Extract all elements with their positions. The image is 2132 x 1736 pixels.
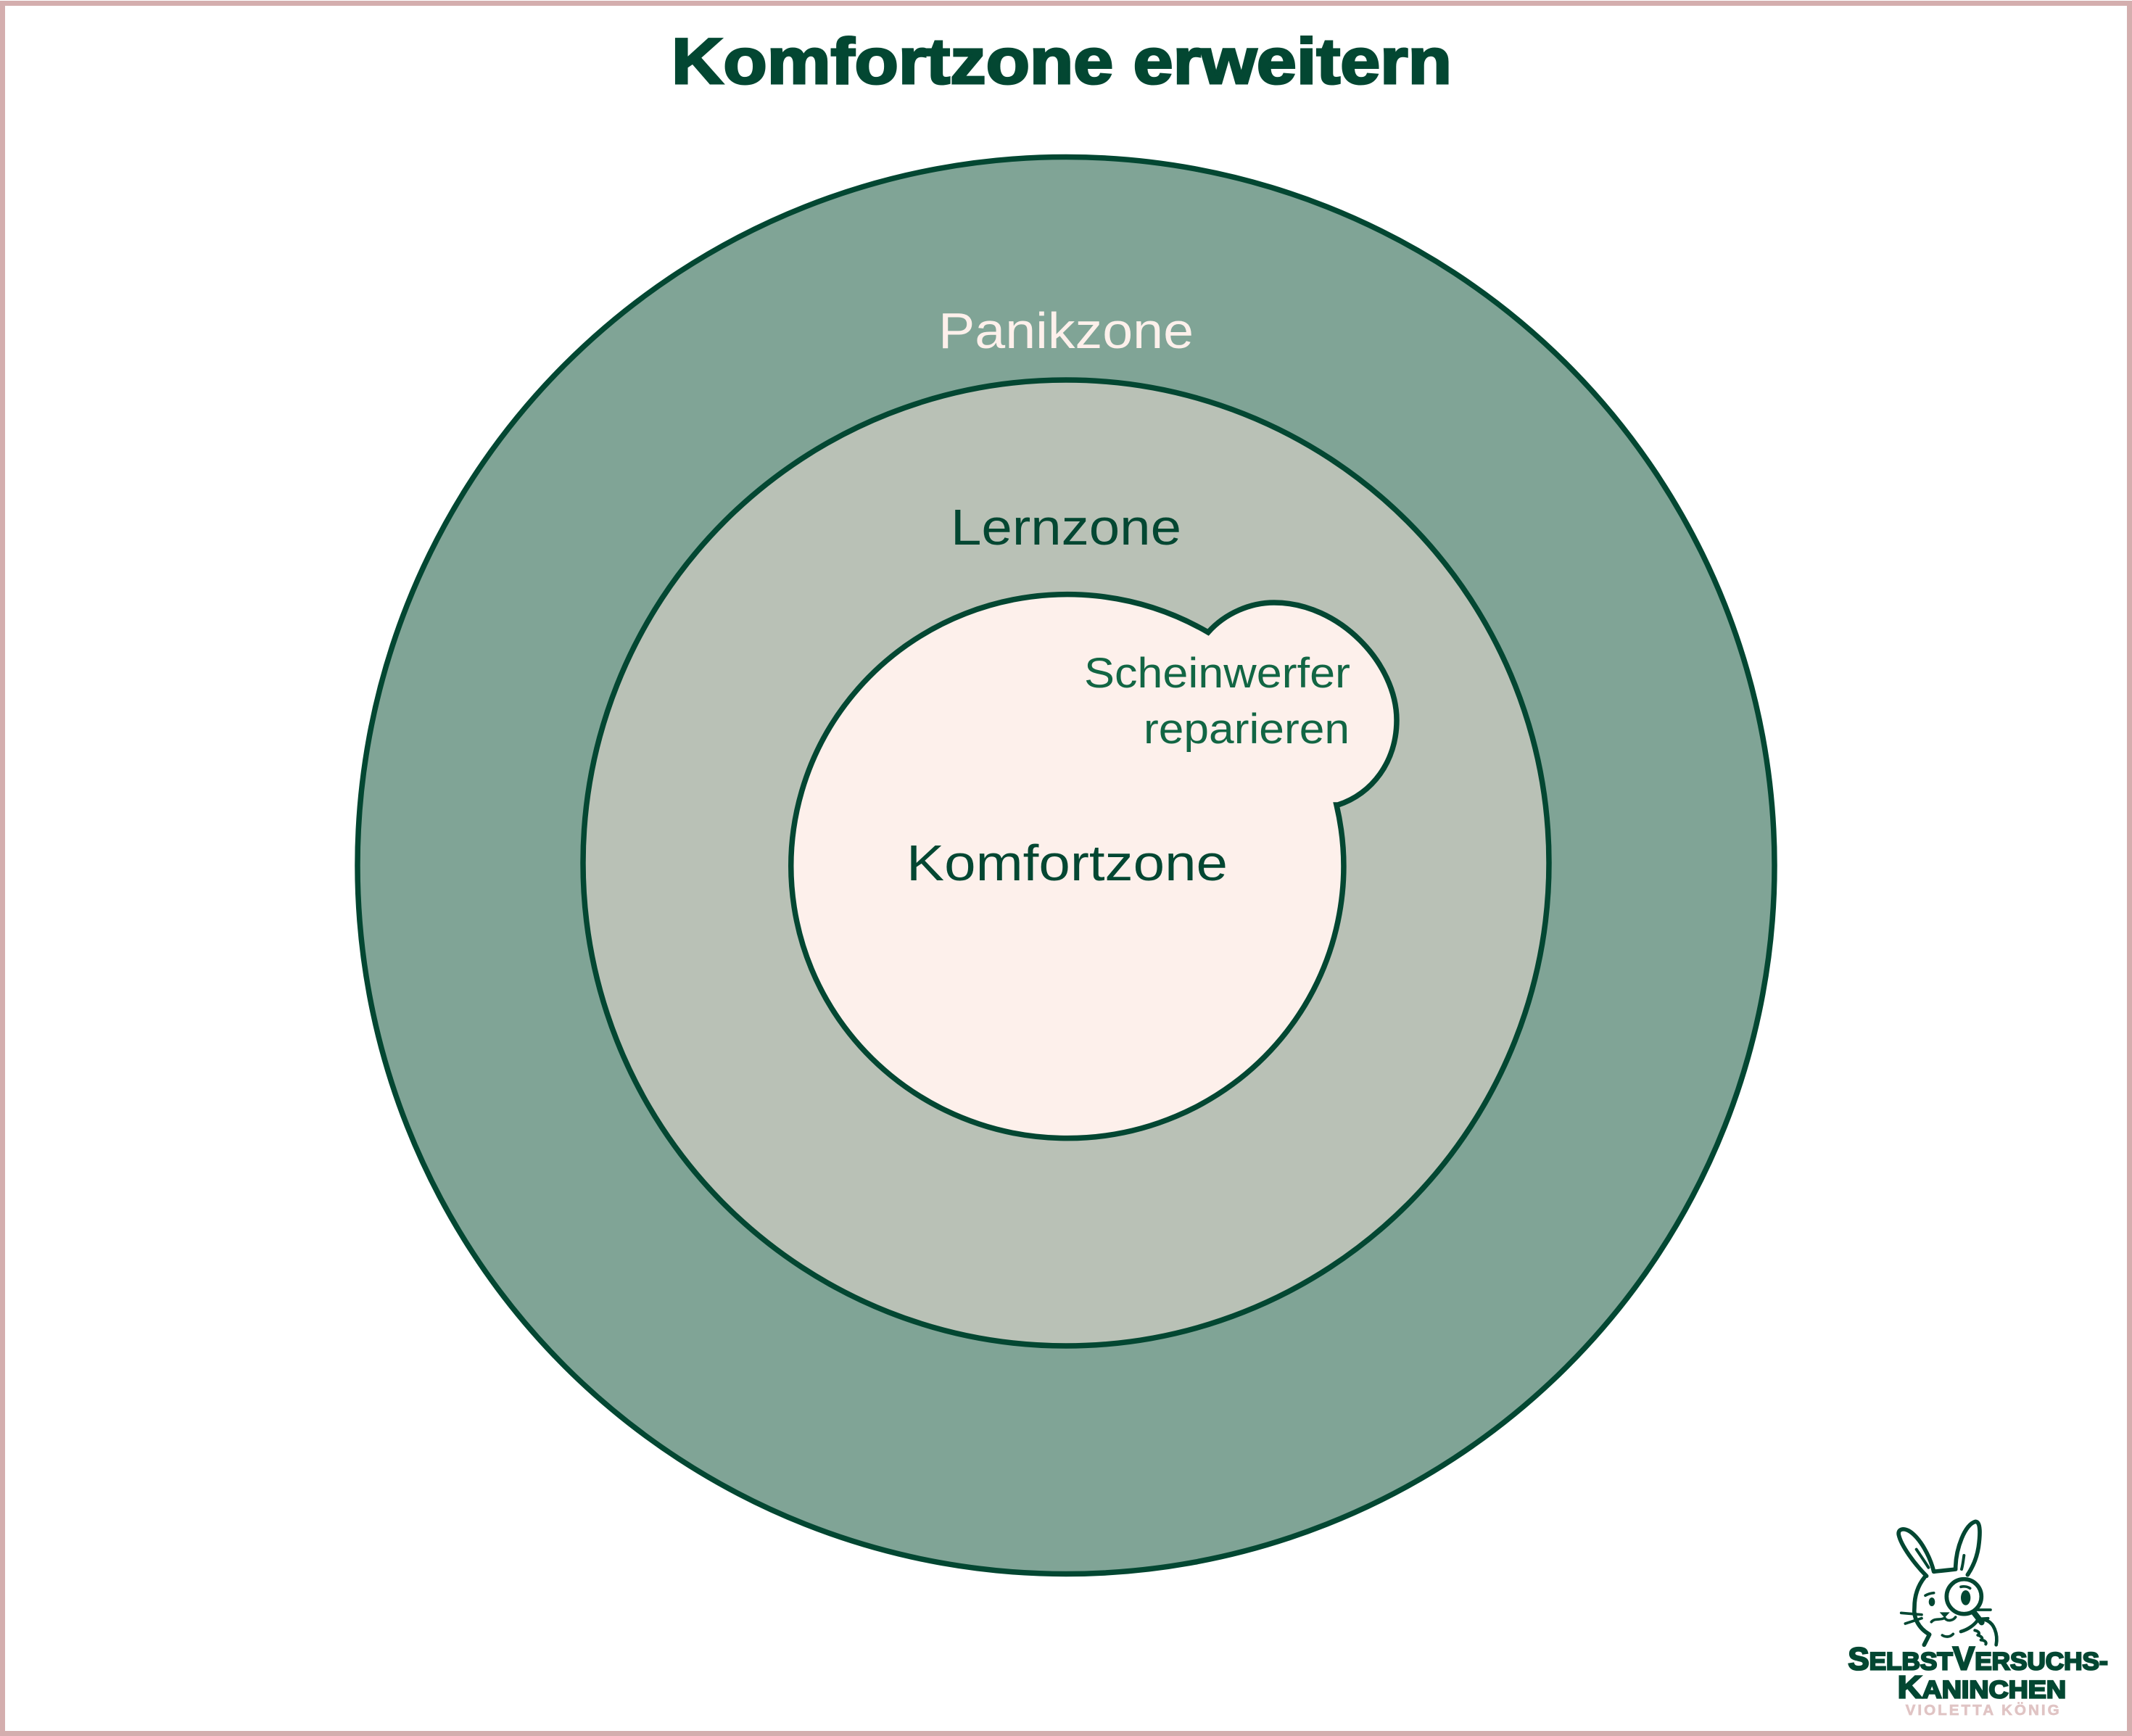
zone: Komfortzone with bulge bbox=[791, 595, 1397, 1138]
icon: rabbit with magnifying glass bbox=[1898, 1521, 1996, 1645]
label: Komfortzone: Komfortzone bbox=[906, 835, 1228, 891]
logo text: Violetta König: VIOLETTA KÖNIG bbox=[1906, 1702, 2059, 1719]
logo text: Kaninchen: KANINCHEN bbox=[1898, 1671, 2066, 1706]
label: Scheinwerfer reparieren: Scheinwerfer bbox=[1084, 650, 1350, 697]
label: Panikzone: Panikzone bbox=[938, 302, 1194, 359]
title: Komfortzone erweitern bbox=[672, 25, 1452, 97]
icon: rabbit eyes and nose bbox=[1929, 1590, 1970, 1618]
label: Scheinwerfer reparieren bbox=[1084, 650, 1350, 753]
label: Lernzone: Lernzone bbox=[951, 499, 1181, 555]
zone: Lernzone bbox=[583, 380, 1549, 1346]
logo: SelbstVersuchs-Kaninchen bbox=[1848, 1521, 2108, 1719]
label: Scheinwerfer reparieren: reparieren bbox=[1144, 706, 1350, 753]
logo text: SelbstVersuchs-: SELBSTVERSUCHS- bbox=[1848, 1640, 2108, 1677]
